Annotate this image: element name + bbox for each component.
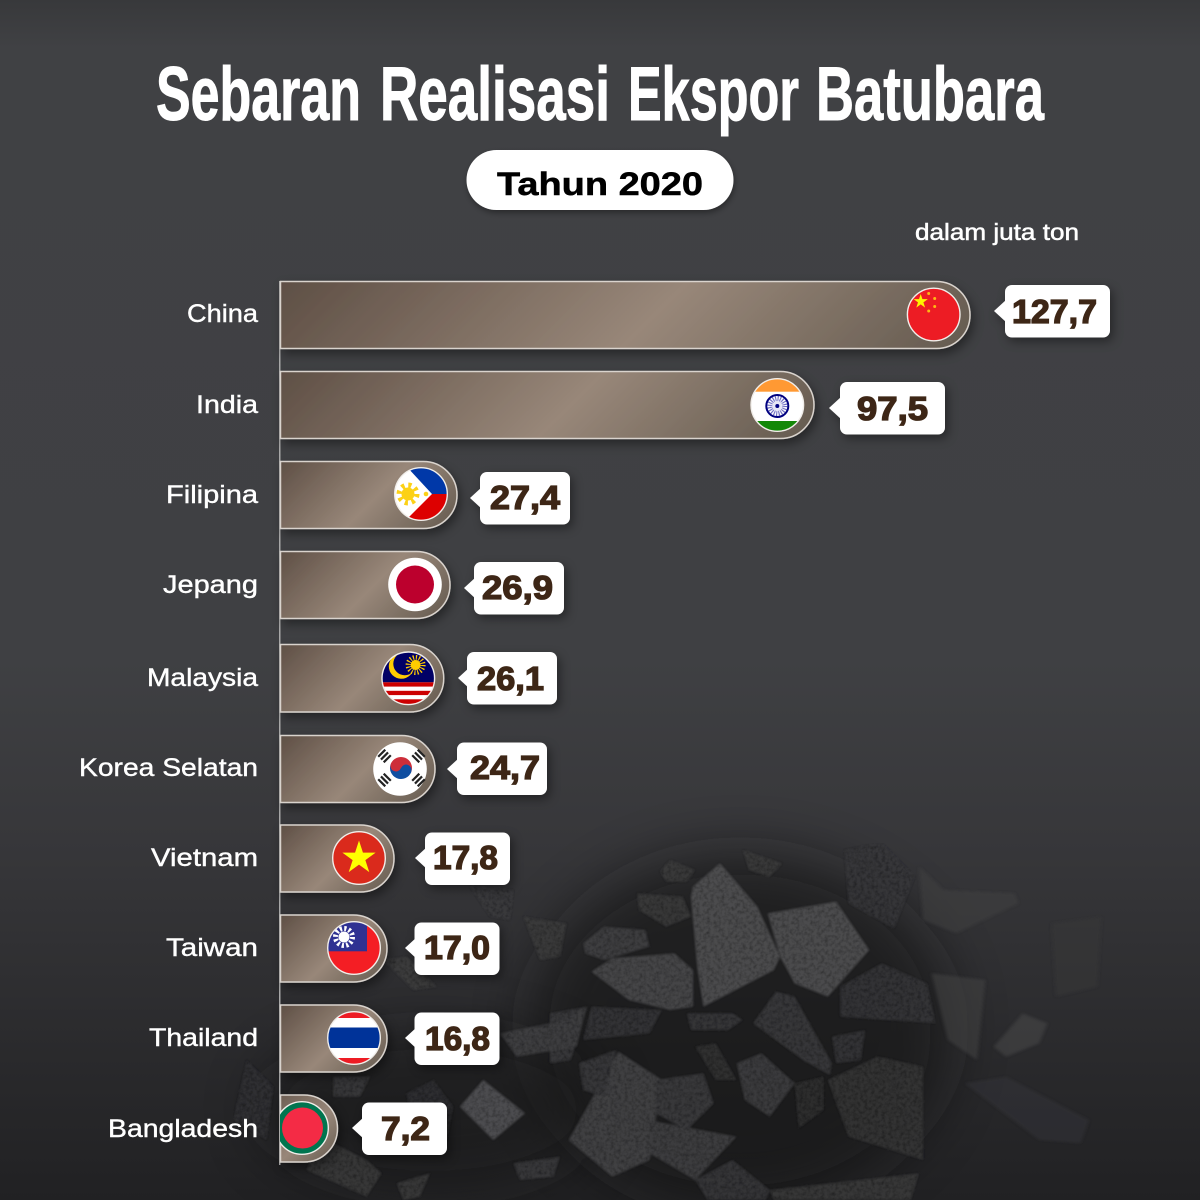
value callout: 24,7: [470, 749, 540, 786]
row: Filipina: [166, 462, 570, 528]
title: Batubara: [816, 52, 1045, 137]
value callout: 26,9: [482, 569, 553, 606]
row: Thailand: [149, 1005, 500, 1072]
bar: [280, 736, 435, 802]
bar: [280, 462, 457, 528]
value callout: 26,1: [477, 660, 544, 697]
country label: Malaysia: [147, 664, 258, 692]
value callout: 16,8: [425, 1020, 490, 1057]
country label: Bangladesh: [108, 1115, 258, 1143]
value callout: 127,7: [1012, 293, 1097, 330]
row: Vietnam: [151, 825, 510, 892]
year pill: Tahun 2020: [497, 166, 703, 202]
value callout: 7,2: [381, 1110, 430, 1147]
chart axis: [279, 281, 280, 1165]
value callout: [458, 652, 557, 704]
flag: Thailand: [327, 1011, 381, 1065]
flag: Malaysia: [381, 651, 435, 705]
bar: [280, 825, 394, 892]
title: Realisasi: [380, 52, 610, 137]
value callout: 17,0: [424, 929, 490, 966]
bar: [280, 1095, 338, 1162]
value callout: [405, 922, 500, 975]
value callout: [464, 562, 564, 614]
country label: Jepang: [163, 571, 258, 599]
value callout: [405, 1012, 500, 1065]
value callout: [470, 472, 570, 524]
flag: India: [750, 378, 804, 432]
country label: India: [196, 391, 258, 419]
row: India: [196, 372, 945, 438]
year pill: [466, 150, 734, 210]
bar: [280, 552, 450, 618]
background: coal rocks: [233, 843, 1101, 1200]
row: China: [187, 282, 1110, 348]
value callout: 97,5: [857, 390, 928, 427]
country label: Vietnam: [151, 844, 258, 872]
country label: China: [187, 300, 258, 328]
row: Korea Selatan: [79, 736, 547, 802]
flag: China: [907, 288, 961, 342]
value callout: [994, 285, 1110, 338]
bar: [280, 915, 387, 982]
flag: Japan: [388, 558, 442, 611]
country label: Thailand: [149, 1024, 258, 1052]
bar: [280, 1005, 387, 1072]
value callout: 17,8: [433, 839, 498, 876]
value callout: [352, 1102, 447, 1155]
bar: [280, 372, 814, 438]
row: Jepang: [163, 552, 564, 618]
flag: South Korea: [373, 742, 427, 796]
country label: Filipina: [166, 481, 258, 509]
title: Ekspor: [628, 52, 799, 137]
row: Taiwan: [166, 915, 500, 982]
flag: Taiwan: [327, 921, 381, 975]
value callout: 27,4: [490, 479, 561, 516]
row: Bangladesh: [108, 1095, 447, 1162]
country label: Korea Selatan: [79, 754, 258, 782]
flag: Philippines: [391, 467, 448, 521]
row: Malaysia: [147, 644, 557, 712]
flag: Vietnam: [332, 831, 386, 885]
value callout: [447, 742, 547, 795]
unit note: dalam juta ton: [915, 219, 1079, 245]
bar: [280, 644, 444, 712]
title: Sebaran: [156, 52, 361, 137]
bar: [280, 282, 970, 348]
country label: Taiwan: [166, 934, 258, 962]
value callout: [829, 382, 945, 434]
value callout: [415, 832, 510, 885]
flag: Bangladesh: [276, 1102, 328, 1154]
